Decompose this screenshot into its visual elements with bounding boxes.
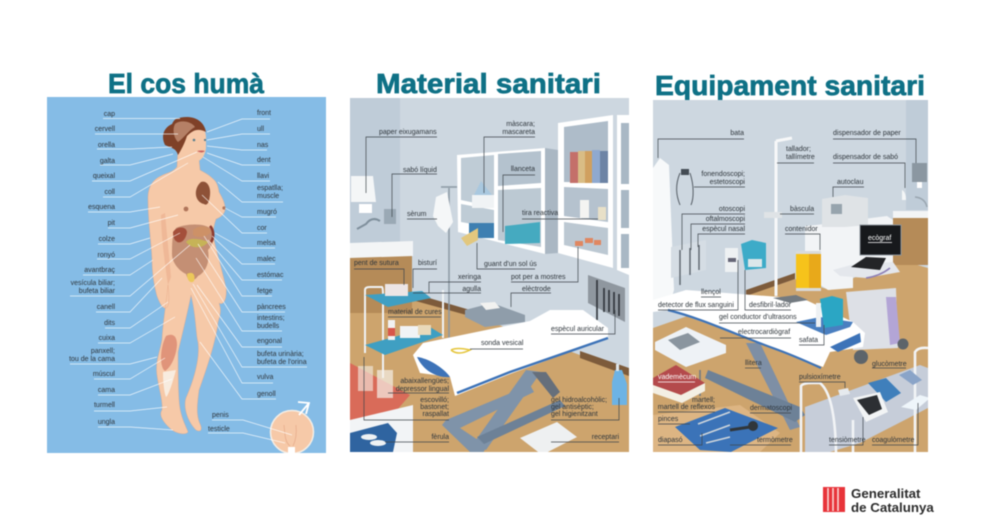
label: fetge: fetge <box>257 288 273 295</box>
label: sèrum: sèrum <box>407 211 427 218</box>
sharps container <box>796 252 821 288</box>
sink cabinet <box>893 215 928 265</box>
label: dent <box>207 153 271 165</box>
label: pàncrees <box>198 244 286 312</box>
label: vulva: vulva <box>257 374 273 381</box>
label: martell: martell; <box>692 397 715 404</box>
label: ull <box>207 126 270 140</box>
label: fèrula <box>385 434 449 442</box>
ECG machine <box>465 303 525 327</box>
label: dits: dits <box>104 320 115 327</box>
label: fonendoscopi <box>694 171 745 187</box>
label: oftalmoscopi <box>691 216 745 250</box>
label: agulla: agulla <box>462 286 481 293</box>
illustration: consulting room <box>350 98 629 455</box>
label: sabó líquid: sabó líquid <box>403 167 437 174</box>
label: tallador <box>777 146 815 163</box>
label: bàscula: bàscula <box>790 206 814 213</box>
label: panxell: panxell; <box>91 348 115 355</box>
label: intestins <box>196 258 285 331</box>
label: llençol: llençol <box>701 289 721 296</box>
label: esquena <box>88 204 160 212</box>
label: bisturí: bisturí <box>418 260 437 267</box>
label: sonda vesical: sonda vesical <box>481 340 524 347</box>
label: guant d'un sol ús <box>477 243 537 269</box>
coat <box>653 158 674 310</box>
label: escovilló: bastonet; <box>420 404 449 411</box>
blood pressure monitor <box>868 378 901 402</box>
wooden table <box>653 405 780 452</box>
towel dispenser <box>351 176 376 202</box>
label: abaixallengües <box>388 378 449 393</box>
label: martell: martell de reflexos <box>658 404 715 411</box>
label: gel hidroalcohòlic: gel hidroalcohòlic; <box>551 397 607 404</box>
bed sheet <box>413 310 608 396</box>
label: safata: safata <box>799 337 818 344</box>
label: electrocardiògraf <box>720 329 791 338</box>
label: bufeta urinària: bufeta urinària; <box>257 351 304 358</box>
head and face <box>180 129 207 161</box>
label: escovilló: raspallat <box>423 411 449 418</box>
label: colze <box>98 236 150 244</box>
label: desfibril·lador <box>745 270 792 310</box>
label: turmell: turmell <box>94 402 115 409</box>
label: tensiòmetre: tensiòmetre <box>829 437 866 444</box>
tall cabinet <box>558 115 613 268</box>
label: desfibril·lador: desfibril·lador <box>749 302 792 309</box>
label: sabó líquid <box>392 167 437 217</box>
label: llitera: llitera <box>745 360 762 367</box>
label: melsa: melsa <box>257 240 276 247</box>
label: dent: dent <box>257 157 271 164</box>
calf muscle <box>161 335 177 371</box>
label: fonendoscopi: fonendoscopi; <box>701 171 745 178</box>
label: bufeta urinària: bufeta de l'orina <box>257 359 307 366</box>
label: escovilló <box>364 357 449 420</box>
label: pot per a mostres <box>511 247 578 282</box>
label: pàncrees: pàncrees <box>257 304 286 311</box>
labels <box>658 130 918 445</box>
label: canell <box>96 278 162 312</box>
heart <box>196 182 210 205</box>
label: cap <box>103 111 180 118</box>
label: galta: galta <box>100 158 115 165</box>
label: engonal <box>197 285 282 347</box>
title: Equipament sanitari: Equipament sanitari <box>655 70 925 101</box>
label: detector de flux sanguini <box>658 260 738 310</box>
label: pulsioxímetre: pulsioxímetre <box>799 374 841 381</box>
ultrasound machine <box>846 288 898 350</box>
label: tensiòmetre <box>829 417 866 445</box>
label: testicle <box>208 426 285 443</box>
label: material de cures: material de cures <box>388 309 442 316</box>
glucometer and others <box>899 370 922 385</box>
label: autoclau: autoclau <box>837 179 864 186</box>
label: dermatoscopi: dermatoscopi <box>750 405 792 412</box>
book <box>653 365 705 395</box>
label: màscara; mascareta: màscara; <box>506 121 535 128</box>
label: avantbraç: avantbraç <box>84 267 115 274</box>
red table <box>350 363 410 420</box>
prescription pad <box>520 422 577 455</box>
label: receptari: receptari <box>592 434 619 441</box>
title: Material sanitari: Material sanitari <box>376 68 601 99</box>
label: llavi: llavi <box>257 173 270 180</box>
label: gel hidroalcohòlic: gel higienitzant <box>551 411 598 418</box>
nipples <box>184 207 188 211</box>
label: cor <box>202 195 267 233</box>
label: orella <box>97 142 172 149</box>
panel: equipament sanitari <box>653 100 930 452</box>
label: paper eixugamans: paper eixugamans <box>379 129 437 136</box>
wall panel <box>588 275 625 322</box>
IV stand <box>441 187 457 338</box>
soap dispenser <box>902 190 906 200</box>
label: pit <box>108 215 178 228</box>
label: ungla <box>98 419 173 430</box>
label: ecògraf: ecògraf <box>868 235 891 242</box>
label: mugró: mugró <box>257 209 277 216</box>
label: bàscula <box>780 206 814 214</box>
wall diagnostic unit <box>671 240 706 278</box>
label: xeringa <box>429 274 481 293</box>
label: bata: bata <box>730 130 744 137</box>
sink unit <box>350 252 412 313</box>
label: pinces <box>658 416 690 424</box>
label: gel hidroalcohòlic <box>551 397 619 420</box>
label: genoll <box>200 342 276 399</box>
logo: Generalitat de Catalunya <box>823 486 934 515</box>
label: ronyó: ronyó <box>97 252 115 259</box>
label: glucòmetre: glucòmetre <box>872 361 907 368</box>
label: coagulòmetre <box>872 403 918 445</box>
label: màscara; mascareta: mascareta <box>502 129 535 136</box>
illustration: female body <box>148 117 226 434</box>
paper dispenser <box>912 163 927 182</box>
label: tira reactiva: tira reactiva <box>522 210 558 217</box>
label: dispensador de paper <box>833 130 916 163</box>
gel bottle <box>612 370 627 405</box>
label: cuixa <box>98 317 175 343</box>
label: fetge <box>204 236 273 296</box>
label: espatlla: espatlla; <box>257 185 283 192</box>
label: estómac: estómac <box>257 272 284 279</box>
label: receptari <box>551 434 619 442</box>
label: martell <box>658 397 715 412</box>
label: turmell <box>94 402 167 411</box>
label: canell: canell <box>97 304 115 311</box>
label: pinces: pinces <box>658 416 679 423</box>
label: cama <box>98 379 172 395</box>
label: esquena: esquena <box>88 204 115 211</box>
blue tray <box>350 423 397 452</box>
label: testicle: testicle <box>208 426 230 433</box>
label: avantbraç <box>83 260 153 275</box>
label: penis <box>212 412 292 435</box>
label: termòmetre <box>730 437 793 445</box>
label: pent de sutura: pent de sutura <box>354 260 399 267</box>
label: cor: cor <box>257 225 267 232</box>
open shelves <box>457 148 545 254</box>
label: cervell <box>95 126 178 134</box>
label: abaixallengües: abaixallengües; <box>400 378 449 385</box>
stretcher base <box>473 370 541 450</box>
label: pent de sutura <box>354 260 404 285</box>
trolley <box>365 287 443 378</box>
label: safata <box>799 325 824 345</box>
label: nas <box>207 142 269 150</box>
label: tallador: tallador; <box>786 146 811 153</box>
label: paper eixugamans <box>366 129 437 193</box>
label: intestins: budells <box>257 323 280 330</box>
label: llanceta <box>503 166 535 232</box>
label: contenidor: contenidor <box>785 226 818 233</box>
label: contenidor <box>785 226 820 250</box>
label: dispensador de sabó <box>833 154 905 188</box>
label: melsa <box>215 233 276 248</box>
icon: senyera <box>823 487 845 512</box>
label: bata <box>658 130 744 158</box>
label: nas: nas <box>257 142 269 149</box>
label: bufeta urinària <box>193 284 307 367</box>
label: cama: cama <box>98 387 115 394</box>
label: espècul auricular <box>551 310 615 334</box>
label: espècul auricular: espècul auricular <box>551 326 605 333</box>
label: bisturí <box>413 260 437 288</box>
label: ronyó <box>97 233 180 259</box>
label: vesícula biliar: vesícula biliar; <box>71 280 115 287</box>
label: fonendoscopi: estetoscopi <box>710 179 745 186</box>
label: dits <box>104 302 168 328</box>
logo: Generalitat de Catalunya: Generalitat <box>851 486 921 501</box>
label: diapasó: diapasó <box>658 437 683 444</box>
label: agulla <box>413 286 481 293</box>
label: malec <box>212 236 276 264</box>
label: oftalmoscopi: oftalmoscopi <box>706 216 745 223</box>
stethoscope <box>677 173 693 205</box>
label: espècul nasal <box>698 226 745 247</box>
label: electrocardiògraf: electrocardiògraf <box>738 329 790 336</box>
label: cervell: cervell <box>95 126 115 133</box>
label: espatlla: muscle <box>257 193 279 200</box>
label: cap: cap <box>104 111 115 118</box>
label: orella: orella <box>98 142 115 149</box>
label: queixal <box>92 152 197 181</box>
soap dispenser <box>384 209 396 224</box>
label: vademècum: vademècum <box>658 374 696 381</box>
label: guant d'un sol ús: guant d'un sol ús <box>484 261 537 268</box>
label: otoscopi: otoscopi <box>719 206 745 213</box>
label: termòmetre: termòmetre <box>757 437 793 444</box>
label: espatlla <box>218 182 283 202</box>
label: ungla: ungla <box>98 419 115 426</box>
label: queixal: queixal <box>93 173 115 180</box>
label: engonal: engonal <box>257 338 282 345</box>
linen and tray <box>773 295 808 303</box>
label: fèrula: fèrula <box>431 434 449 441</box>
equipment table <box>805 365 928 452</box>
label: llanceta: llanceta <box>511 166 535 173</box>
instrument tray <box>675 408 778 452</box>
label: ull: ull <box>257 126 264 133</box>
defibrillator <box>741 240 766 270</box>
label: mugró <box>225 208 277 217</box>
label: gel conductor d'ultrasons: gel conductor d'ultrasons <box>719 314 797 321</box>
label: autoclau <box>833 179 864 197</box>
label: dispensador de paper: dispensador de paper <box>833 130 901 137</box>
label: múscul <box>93 358 165 379</box>
label: elèctrode: elèctrode <box>522 286 551 293</box>
label: gel conductor d'ultrasons <box>719 314 815 323</box>
label: dispensador de sabó: dispensador de sabó <box>833 154 898 161</box>
ECG <box>655 327 726 367</box>
label: abaixallengües: depressor lingual <box>396 386 449 393</box>
title: El cos humà: El cos humà <box>108 68 264 99</box>
cabinet and autoclave <box>805 216 893 290</box>
stretcher <box>746 343 800 430</box>
label: coll <box>103 163 188 197</box>
label: detector de flux sanguini: detector de flux sanguini <box>658 302 734 309</box>
height meter and scale <box>776 138 792 296</box>
label: elèctrode <box>511 286 551 307</box>
label: penis: penis <box>212 412 229 419</box>
label: màscara; mascareta <box>484 121 535 193</box>
label: múscul: múscul <box>93 371 115 378</box>
labels <box>354 121 619 442</box>
label: colze: colze <box>99 236 115 243</box>
panel: material sanitari <box>350 98 629 455</box>
label: vesícula biliar: bufeta biliar <box>79 288 116 295</box>
label: panxell: tou de la cama <box>69 356 115 363</box>
label: tira reactiva <box>522 210 598 219</box>
illustration: equipment room <box>653 100 930 452</box>
label: espècul nasal: espècul nasal <box>702 226 745 233</box>
label: sonda vesical <box>470 340 524 349</box>
label: pit: pit <box>108 220 115 227</box>
label: galta <box>100 154 173 165</box>
label: vulva <box>191 288 273 383</box>
flow detector <box>725 248 738 272</box>
left labels <box>69 111 197 430</box>
label: panxell <box>69 348 157 364</box>
right labels <box>191 110 307 443</box>
label: vesícula biliar <box>70 245 190 296</box>
label: cuixa: cuixa <box>99 335 115 342</box>
label: front <box>207 110 271 132</box>
label: coll: coll <box>104 189 115 196</box>
label: front: front <box>257 110 271 117</box>
label: xeringa: xeringa <box>458 274 481 281</box>
label: llavi <box>203 157 270 181</box>
label: otoscopi <box>682 206 745 250</box>
label: pulsioxímetre <box>799 374 845 388</box>
label: coagulòmetre: coagulòmetre <box>872 437 915 444</box>
label: genoll: genoll <box>257 391 276 398</box>
label: tallador: tallímetre <box>786 154 815 161</box>
sheet <box>653 290 865 367</box>
panel: human body <box>47 97 326 454</box>
logo: Generalitat de Catalunya: de Catalunya <box>851 500 934 515</box>
label: diapasó <box>658 433 702 445</box>
organs <box>172 224 214 280</box>
label: pot per a mostres: pot per a mostres <box>511 274 566 281</box>
label: sèrum <box>407 211 437 219</box>
label: estómac <box>208 240 284 280</box>
label: malec: malec <box>257 256 276 263</box>
label: escovilló: escovilló; <box>420 397 449 404</box>
male detail icon <box>270 402 314 454</box>
label: gel hidroalcohòlic: gel antisèptic; <box>551 404 594 411</box>
label: intestins: intestins; <box>257 315 285 322</box>
